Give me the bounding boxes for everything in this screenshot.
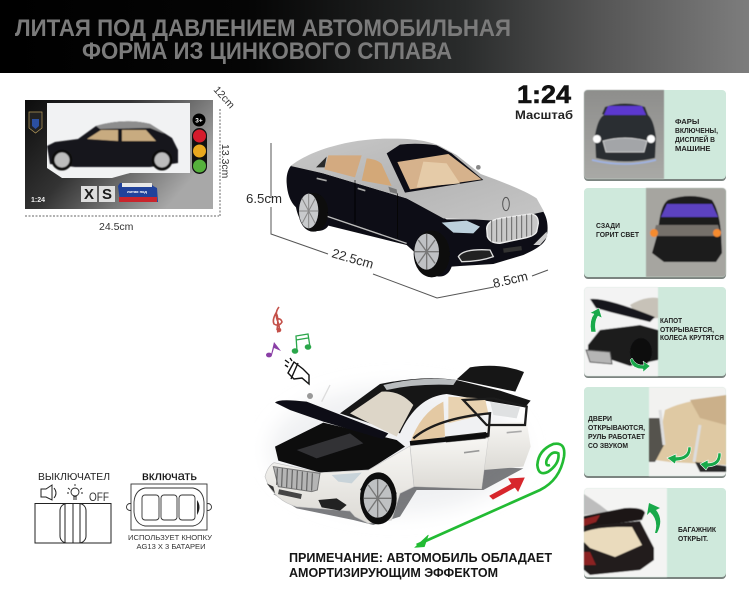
icon: green arrow up (647, 503, 660, 533)
title: ФОРМА ИЗ ЦИНКОВОГО СПЛАВА (82, 38, 452, 65)
main car dimensions: 8.5cm (491, 268, 529, 291)
main car: black and silver (287, 139, 548, 277)
caption: ДИСПЛЕЙ В (675, 135, 715, 144)
box window (47, 103, 190, 178)
caption (660, 316, 724, 342)
photo: car rear (646, 188, 726, 277)
caption: ГОРИТ СВЕТ (596, 230, 639, 239)
header banner (0, 0, 749, 73)
icon: green arrow wheel (630, 358, 650, 372)
caption: ОТКРЫВАЮТСЯ, (588, 423, 645, 432)
age badge (192, 114, 206, 126)
photo: car front with lights (584, 90, 664, 179)
main car dimensions: 6.5cm (246, 191, 282, 206)
green spiral arrow (415, 444, 564, 547)
box label (118, 183, 158, 202)
main car dimensions: 22.5cm (330, 245, 375, 272)
photo: open hood (584, 287, 658, 376)
panel: headlights (584, 90, 726, 181)
switch diagram: OFF (89, 492, 109, 504)
slide switch (35, 504, 111, 543)
icon: green door arrow rear (700, 453, 721, 470)
note text: АМОРТИЗИРУЮЩИМ ЭФФЕКТОМ (289, 566, 498, 580)
box car side view (47, 121, 178, 170)
icon: purple note (266, 342, 281, 357)
box label: литая под (127, 189, 147, 194)
icon: green door arrow front (667, 447, 691, 464)
front body (265, 446, 414, 523)
icon: bulb (67, 484, 83, 499)
caption (678, 525, 716, 543)
XS logo (81, 186, 115, 203)
note text: ПРИМЕЧАНИЕ: АВТОМОБИЛЬ ОБЛАДАЕТ (289, 551, 552, 565)
note text (289, 551, 552, 580)
engine bay (275, 423, 405, 473)
icon: sound speaker (285, 358, 309, 384)
caption: ОТКРЫТ. (678, 534, 708, 543)
caption: МАШИНЕ (675, 144, 710, 153)
caption (596, 221, 639, 239)
caption: СЗАДИ (596, 221, 620, 230)
XS logo: S (102, 186, 112, 203)
battery diagram: AG13 X 3 БАТАРЕИ (136, 542, 206, 551)
photo: open doors (649, 387, 726, 476)
scale label: Масштаб (515, 108, 573, 122)
icon: green arrow up (590, 308, 602, 332)
caption (588, 414, 645, 450)
box dimensions: 13.3cm (219, 144, 231, 179)
panel: doors open (584, 387, 726, 478)
caption: ВКЛЮЧЕНЫ, (675, 126, 718, 135)
caption: КОЛЕСА КРУТЯТСЯ (660, 333, 724, 342)
panel: product box (25, 100, 213, 209)
caption: СО ЗВУКОМ (588, 441, 628, 450)
photo: open trunk (584, 488, 667, 577)
XS logo: X (84, 186, 94, 203)
panel: trunk open (584, 488, 726, 579)
second car: white with open doors (265, 366, 531, 525)
traffic light buttons (192, 128, 207, 174)
icon: treble clef (273, 307, 282, 332)
icon: speaker (41, 485, 56, 500)
brand badge (29, 112, 42, 133)
caption: БАГАЖНИК (678, 525, 716, 534)
caption: ФАРЫ (675, 117, 699, 126)
battery diagram: включать (142, 469, 197, 483)
box dimensions: 24.5cm (99, 221, 134, 233)
sound icons (266, 307, 311, 384)
caption: ДВЕРИ (588, 414, 612, 423)
box dimensions (25, 84, 237, 233)
caption: КАПОТ (660, 316, 682, 325)
scale label: 1:24 (517, 81, 571, 109)
switch diagram: ВЫКЛЮЧАТЕЛ (38, 471, 110, 483)
box dimensions: 12cm (211, 84, 237, 111)
battery diagram (126, 469, 212, 551)
main car grille (487, 214, 538, 243)
switch diagram (35, 471, 111, 543)
title (15, 15, 511, 65)
panel: hood open (584, 287, 726, 378)
rear door (463, 398, 531, 470)
box scale: 1:24 (31, 197, 45, 204)
caption: РУЛЬ РАБОТАЕТ (588, 432, 645, 441)
caption: ОТКРЫВАЕТСЯ, (660, 325, 714, 334)
main car dimensions (246, 143, 548, 298)
age badge: 3+ (195, 118, 203, 124)
title: ЛИТАЯ ПОД ДАВЛЕНИЕМ АВТОМОБИЛЬНАЯ (15, 15, 511, 42)
scale label (515, 81, 573, 122)
battery diagram: ИСПОЛЬЗУЕТ КНОПКУ (128, 533, 212, 542)
red arrow (490, 478, 524, 499)
icon: green notes (292, 334, 311, 353)
caption (675, 117, 718, 153)
panel: rear lights (584, 188, 726, 279)
front door (410, 413, 490, 489)
ground shadow (273, 467, 523, 525)
open hood (275, 400, 388, 439)
